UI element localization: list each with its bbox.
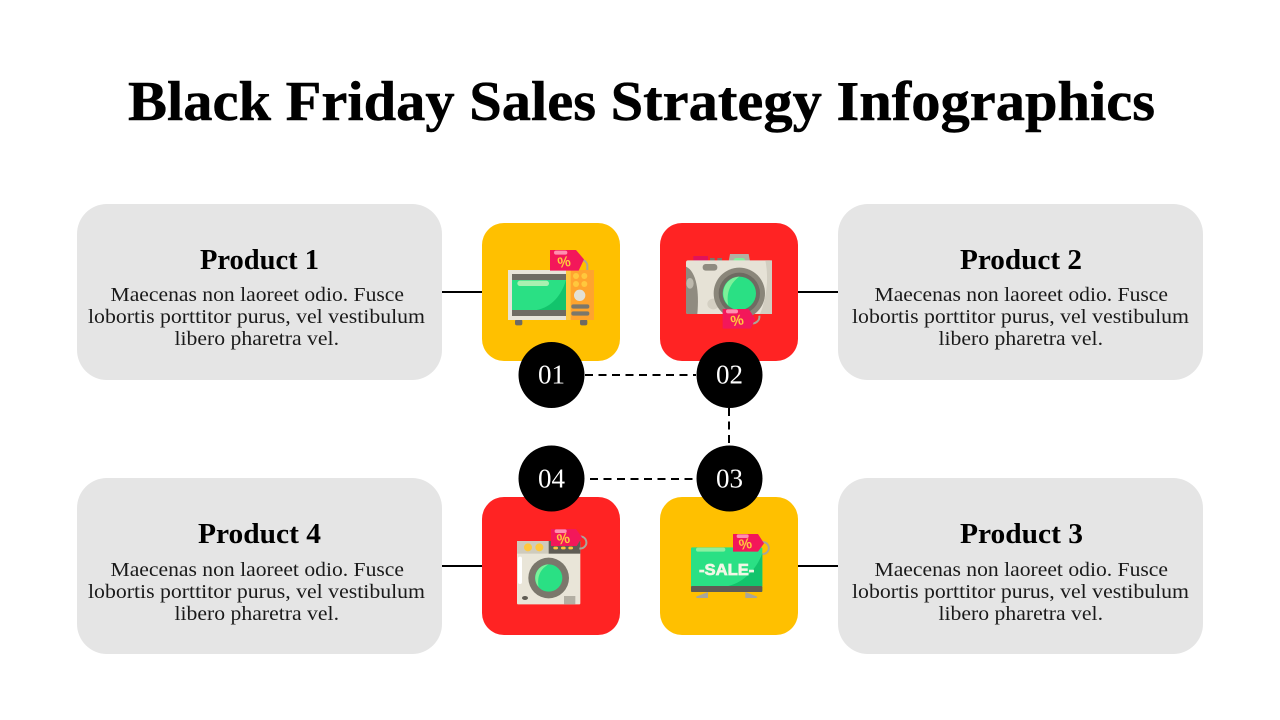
heading: product 2: Product 2	[960, 245, 1082, 276]
text block: product 1: Maecenas non laoreet odio. Fusce	[110, 284, 404, 306]
badge: 03: 03	[716, 464, 743, 494]
text block: product 2	[852, 284, 1189, 350]
icon: sale television with price tag: -SALE-	[699, 562, 754, 579]
heading: product 1: Product 1	[200, 245, 319, 276]
icon: microwave with price tag: %	[556, 254, 572, 272]
panel: product 3	[838, 478, 1203, 654]
panel: product 1	[77, 204, 442, 380]
text block: product 2: lobortis porttitor purus, vel vestibulum	[852, 306, 1189, 328]
badge: 01: 01	[538, 360, 565, 390]
icon: microwave with price tag	[508, 250, 594, 325]
tile: product 3 yellow	[660, 497, 798, 635]
icon: camera with price tag: %	[729, 312, 745, 330]
text block: product 4: lobortis porttitor purus, vel vestibulum	[88, 581, 425, 603]
text block: product 3: libero pharetra vel.	[938, 603, 1103, 625]
panel: product 2	[838, 204, 1203, 380]
text block: product 4: Maecenas non laoreet odio. Fusce	[110, 559, 404, 581]
tile: product 1 yellow	[482, 223, 620, 361]
text block: product 3: lobortis porttitor purus, vel vestibulum	[852, 581, 1189, 603]
text block: product 4	[88, 559, 425, 625]
text block: product 1: lobortis porttitor purus, vel vestibulum	[88, 306, 425, 328]
panel: product 4	[77, 478, 442, 654]
text block: product 1	[88, 284, 425, 350]
title: Black Friday Sales Strategy Infographics	[128, 71, 1155, 133]
text block: product 2: libero pharetra vel.	[938, 328, 1103, 350]
tile: product 4 red	[482, 497, 620, 635]
text block: product 3: Maecenas non laoreet odio. Fusce	[874, 559, 1168, 581]
badge: 04	[518, 446, 584, 512]
badge: 02	[696, 342, 762, 408]
icon: washing machine with price tag	[517, 529, 586, 604]
icon: sale television with price tag: %	[738, 536, 753, 554]
icon: sale television with price tag	[691, 534, 769, 598]
icon: camera with price tag	[686, 254, 772, 330]
badge: 04: 04	[538, 464, 566, 494]
icon: washing machine with price tag: %	[556, 531, 571, 549]
heading: product 3: Product 3	[960, 519, 1083, 550]
badge: 01	[518, 342, 584, 408]
text block: product 2: Maecenas non laoreet odio. Fusce	[874, 284, 1168, 306]
tile: product 2 red	[660, 223, 798, 361]
heading: product 4: Product 4	[198, 519, 321, 550]
badge: 02: 02	[716, 360, 743, 390]
badge: 03	[696, 446, 762, 512]
text block: product 3	[852, 559, 1189, 625]
text block: product 4: libero pharetra vel.	[174, 603, 339, 625]
text block: product 1: libero pharetra vel.	[174, 328, 339, 350]
